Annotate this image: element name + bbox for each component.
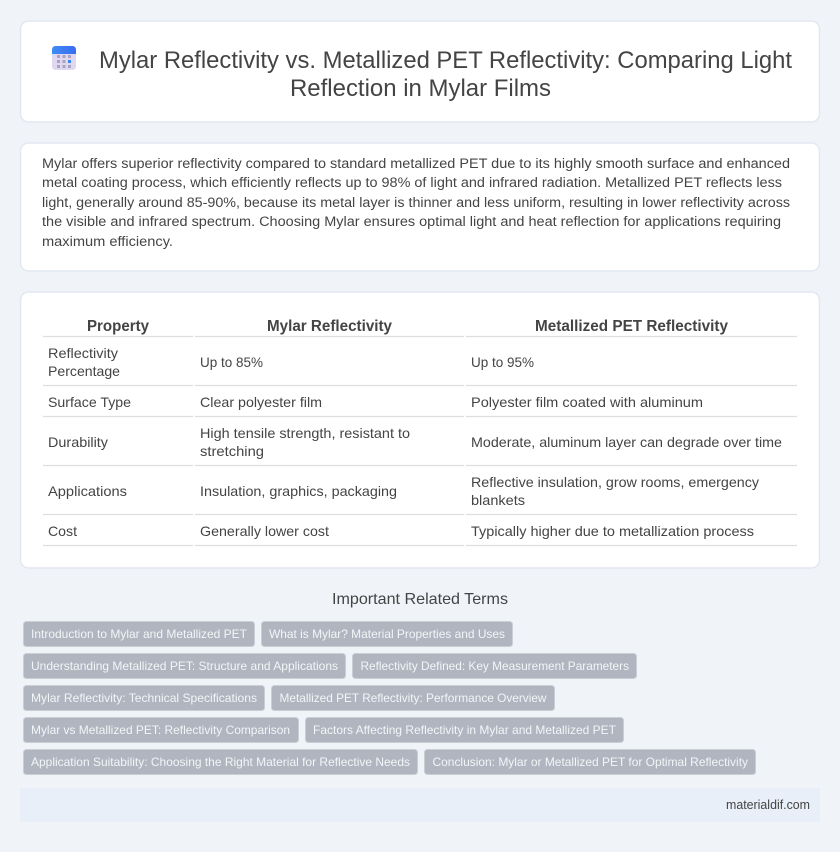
tag: [24, 686, 264, 710]
row: durability: Durability: [48, 434, 108, 450]
row: applications: Applications: [48, 483, 127, 499]
title: [99, 47, 792, 102]
title: Reflection in Mylar Films: [290, 75, 551, 102]
row: cost: [48, 523, 754, 539]
table header row: [87, 318, 728, 335]
table header row: Metallized PET Reflectivity: [535, 318, 728, 335]
text block: summary: metal coating process, which efficiently reflects up to 98% of light and infrared radiation. Metallized PET reflects less: [42, 175, 782, 191]
panel: summary paragraph: [20, 143, 820, 271]
tag: [24, 750, 418, 774]
tag: Introduction to Mylar and Metallized PET: [31, 627, 248, 641]
row: surface type: Surface Type: [48, 394, 131, 410]
row: cost: Generally lower cost: [200, 523, 329, 539]
tag: [24, 622, 254, 646]
row: durability: High tensile strength, resistant to: [200, 425, 410, 441]
tag: Understanding Metallized PET: Structure and Applications: [31, 659, 338, 673]
tag: [262, 622, 512, 646]
title: Mylar Reflectivity vs. Metallized PET Reflectivity: Comparing Light: [99, 47, 792, 74]
tag: Factors Affecting Reflectivity in Mylar and Metallized PET: [313, 723, 617, 737]
row: applications: blankets: [471, 492, 525, 508]
row: durability: [48, 425, 782, 459]
text block: summary: Mylar offers superior reflectivity compared to standard metallized PET due to its highly smooth surface and enhanced: [42, 156, 790, 172]
row: reflectivity percentage: Up to 95%: [471, 354, 534, 370]
table header row: Mylar Reflectivity: [267, 318, 392, 335]
row: applications: Insulation, graphics, packaging: [200, 483, 397, 499]
tag: Mylar vs Metallized PET: Reflectivity Comparison: [31, 723, 290, 737]
tag: What is Mylar? Material Properties and Uses: [269, 627, 505, 641]
row: reflectivity percentage: [48, 345, 534, 379]
row: applications: [48, 474, 759, 508]
row: surface type: Clear polyester film: [200, 394, 322, 410]
tag: [352, 654, 636, 678]
tag: Conclusion: Mylar or Metallized PET for Optimal Reflectivity: [432, 755, 748, 769]
tag: [272, 686, 554, 710]
text block: summary: maximum efficiency.: [42, 234, 173, 250]
tag: [306, 718, 624, 742]
row: reflectivity percentage: Up to 85%: [200, 354, 263, 370]
heading: important related terms: Important Related Terms: [332, 591, 508, 608]
tag: [24, 654, 346, 678]
footer bar: [20, 788, 820, 822]
table header row: Property: [87, 318, 149, 335]
row: reflectivity percentage: Percentage: [48, 363, 120, 379]
tag: [24, 718, 298, 742]
footer bar: materialdif.com: [726, 797, 810, 812]
tag: Mylar Reflectivity: Technical Specifications: [31, 691, 257, 705]
text block: summary: light, generally around 85-90%, because its metal layer is thinner and less uniform, resulting in lower reflectivity across: [42, 195, 790, 211]
row: applications: Reflective insulation, grow rooms, emergency: [471, 474, 759, 490]
row: reflectivity percentage: Reflectivity: [48, 345, 118, 361]
row: surface type: [48, 394, 703, 410]
row: durability: stretching: [200, 443, 264, 459]
tag: Reflectivity Defined: Key Measurement Parameters: [360, 659, 629, 673]
panel: comparison table: [20, 292, 820, 568]
row: durability: Moderate, aluminum layer can degrade over time: [471, 434, 782, 450]
tag: Application Suitability: Choosing the Right Material for Reflective Needs: [31, 755, 410, 769]
panel: title header: [20, 21, 820, 122]
tag: [424, 750, 756, 774]
tag: Metallized PET Reflectivity: Performance Overview: [280, 691, 547, 705]
related terms tags: [24, 622, 756, 774]
text block: summary: [42, 156, 790, 250]
row: cost: Typically higher due to metallization process: [471, 523, 754, 539]
icon: calendar: [52, 46, 76, 70]
text block: summary: the visible and infrared spectrum. Choosing Mylar ensures optimal light and heat reflection for applications requiring: [42, 214, 781, 230]
row: surface type: Polyester film coated with aluminum: [471, 394, 703, 410]
row: cost: Cost: [48, 523, 77, 539]
